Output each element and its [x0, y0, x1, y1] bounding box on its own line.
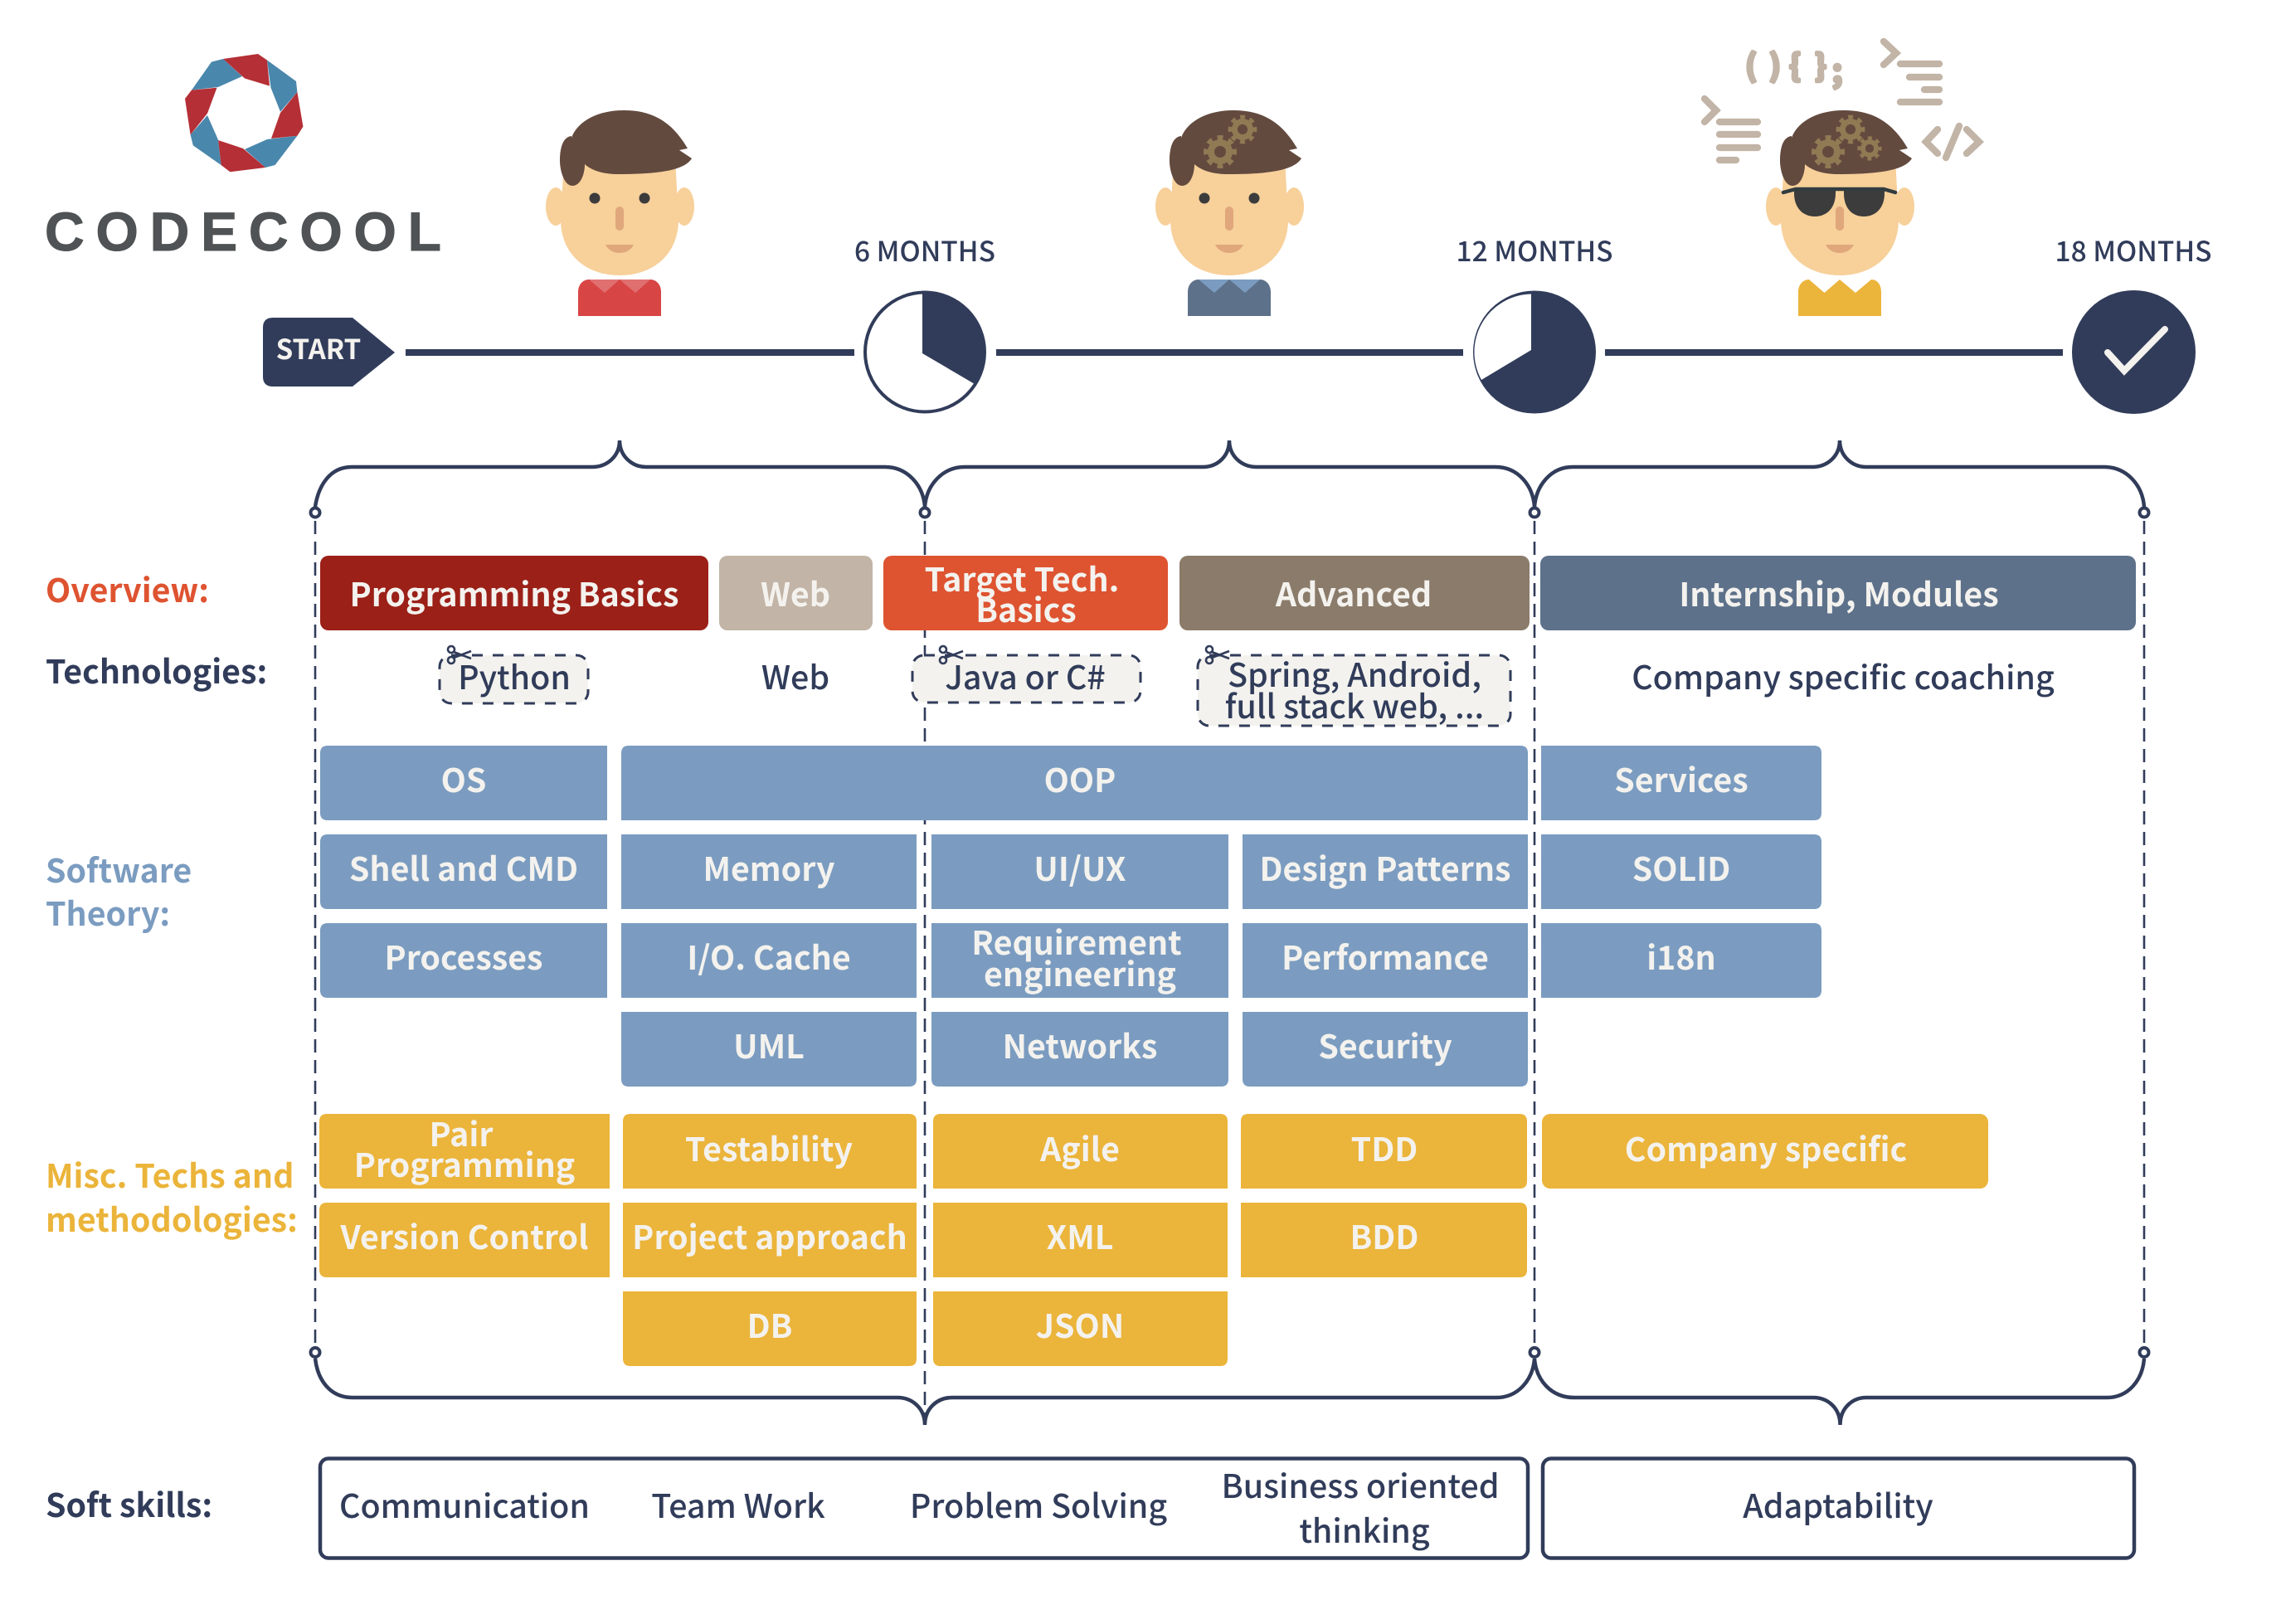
security: [1243, 1012, 1528, 1087]
uml: [621, 1012, 917, 1087]
character: with gears: [1155, 110, 1304, 316]
tech: spring android: Spring, Android,: [1228, 649, 1481, 697]
phase: web: Web: [761, 569, 830, 616]
agile: [933, 1114, 1228, 1189]
label: misc techs: Misc. Techs and: [46, 1150, 294, 1198]
agile: Agile: [1039, 1124, 1120, 1171]
bdd: [1241, 1203, 1527, 1277]
performance: [1243, 923, 1528, 998]
icon: terminal lines top: [1884, 41, 1939, 102]
dashed phase dividers: [315, 521, 2144, 1423]
icon: html tag: [1926, 126, 1979, 158]
technologies row: [440, 646, 2055, 728]
logo mark: [185, 54, 303, 172]
soft skills panel: first three phases: thinking: [1299, 1505, 1430, 1553]
os: OS: [441, 755, 486, 802]
json: [933, 1291, 1228, 1366]
bdd: BDD: [1350, 1212, 1418, 1259]
misc techs grid: [319, 1109, 1988, 1366]
i18n: i18n: [1646, 932, 1716, 980]
processes: [320, 923, 607, 998]
testability: Testability: [685, 1124, 854, 1171]
testability: [623, 1114, 917, 1189]
version control: [319, 1203, 610, 1277]
shell and cmd: Shell and CMD: [349, 844, 578, 891]
design patterns: [1243, 834, 1528, 909]
company specific: [1542, 1114, 1988, 1189]
phase: target tech basics: [883, 554, 1168, 632]
db: DB: [747, 1301, 792, 1348]
phase: programming basics: [320, 556, 708, 630]
tech: company coaching: Company specific coaching: [1632, 652, 2055, 699]
label: soft skills: Soft skills:: [46, 1480, 212, 1527]
tech: java or c#: [912, 646, 1140, 703]
solid: [1541, 834, 1821, 909]
networks: Networks: [1003, 1021, 1157, 1068]
start marker: [263, 318, 395, 387]
phase: internship: Internship, Modules: [1679, 569, 1999, 616]
solid: SOLID: [1632, 844, 1730, 891]
row labels: [46, 565, 298, 1527]
db: [623, 1291, 917, 1366]
label: overview: Overview:: [46, 565, 209, 612]
phase: target tech basics: Basics: [975, 585, 1077, 632]
xml: XML: [1047, 1212, 1113, 1259]
networks: [931, 1012, 1228, 1087]
memory: Memory: [703, 844, 835, 891]
soft skills panel: internship: [1543, 1458, 2134, 1558]
os: [320, 746, 607, 820]
memory: [621, 834, 917, 909]
i/o cache: [621, 923, 917, 998]
tech: spring android: [1198, 646, 1510, 728]
icon: code punctuation: [1745, 42, 1842, 91]
icon: code punctuation: }: [1815, 42, 1826, 85]
pair programming: [319, 1109, 610, 1189]
phase: advanced: [1179, 556, 1530, 630]
json: JSON: [1036, 1301, 1124, 1348]
tdd: [1241, 1114, 1527, 1189]
overview row: [320, 554, 2136, 632]
ui/ux: [931, 834, 1228, 909]
soft skills panel: first three phases: [320, 1458, 1528, 1558]
soft skills panel: first three phases: Business oriented: [1221, 1461, 1500, 1508]
tech: web: Web: [761, 652, 829, 699]
project approach: Project approach: [632, 1212, 907, 1259]
uml: UML: [733, 1021, 805, 1068]
i/o cache: I/O. Cache: [687, 932, 851, 980]
pair programming: Programming: [354, 1140, 575, 1187]
tech: python: Python: [458, 652, 571, 699]
milestone: 12 months: [1456, 229, 1613, 413]
character: expert with sunglasses and code: [1705, 41, 1979, 316]
top brace: [310, 440, 2148, 518]
phase: advanced: Advanced: [1275, 569, 1432, 616]
label: software theory: Theory:: [46, 888, 170, 936]
milestone: 18 months: 18 MONTHS: [2055, 229, 2212, 270]
xml: [933, 1203, 1228, 1277]
security: Security: [1318, 1021, 1452, 1068]
label: technologies: Technologies:: [46, 646, 267, 693]
project approach: [623, 1203, 917, 1277]
phase: target tech basics: Target Tech.: [925, 554, 1119, 601]
phase: programming basics: Programming Basics: [350, 569, 678, 616]
label: misc techs: methodologies:: [46, 1194, 298, 1242]
shell and cmd: [320, 834, 607, 909]
milestone: 18 months: [2055, 229, 2212, 414]
pair programming: Pair: [430, 1109, 494, 1156]
company specific: Company specific: [1625, 1124, 1907, 1171]
icon: code punctuation: ;: [1832, 46, 1842, 91]
character: beginner: [546, 110, 694, 316]
tech: python: [440, 646, 588, 703]
processes: Processes: [384, 932, 543, 980]
icon: code punctuation: (: [1745, 42, 1757, 85]
label: software theory: [46, 845, 192, 936]
oop: [621, 746, 1528, 820]
phase: web: [719, 556, 873, 630]
tech: java or c#: Java or C#: [945, 652, 1106, 699]
logo wordmark: CODECOOL: [45, 201, 441, 262]
tech: spring android: full stack web, ...: [1225, 681, 1484, 728]
tdd: TDD: [1351, 1124, 1418, 1171]
start marker: START: [276, 328, 361, 367]
milestone: 6 months: [854, 229, 995, 411]
soft skills panel: first three phases: Problem Solving: [910, 1481, 1167, 1528]
soft skills panel: first three phases: Communication: [339, 1481, 590, 1528]
soft skills panel: first three phases: Team Work: [651, 1481, 825, 1528]
bottom brace: [310, 1348, 2148, 1425]
requirement engineering: Requirement: [971, 917, 1182, 965]
services: Services: [1614, 755, 1748, 802]
ui/ux: UI/UX: [1034, 844, 1126, 891]
version control: Version Control: [339, 1212, 589, 1259]
performance: Performance: [1282, 932, 1489, 980]
i18n: [1541, 923, 1821, 998]
design patterns: Design Patterns: [1260, 844, 1510, 891]
requirement engineering: engineering: [984, 949, 1176, 996]
phase: internship: [1540, 556, 2136, 630]
oop: OOP: [1044, 755, 1116, 802]
icon: code punctuation: ): [1769, 42, 1781, 85]
milestone: 12 months: 12 MONTHS: [1456, 229, 1613, 270]
icon: terminal lines left: [1705, 99, 1758, 160]
icon: code punctuation: {: [1789, 42, 1801, 85]
software theory grid: [320, 746, 1821, 1087]
requirement engineering: [931, 917, 1228, 998]
milestone: 6 months: 6 MONTHS: [854, 229, 995, 270]
label: software theory: Software: [46, 845, 192, 892]
services: [1541, 746, 1821, 820]
timeline: [263, 229, 2212, 414]
soft skills panel: internship: Adaptability: [1743, 1481, 1933, 1528]
label: misc techs: [46, 1150, 298, 1242]
logo: Codecool: [45, 54, 441, 262]
